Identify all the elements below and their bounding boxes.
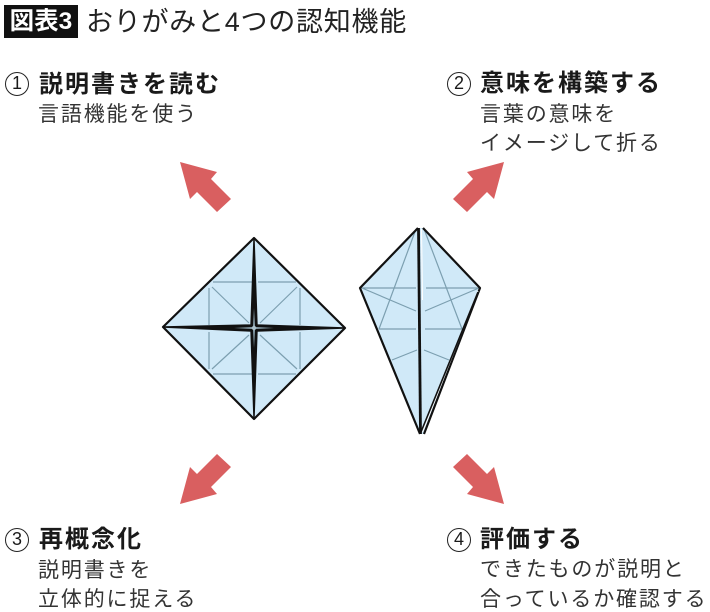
number 3: 3 [12,529,22,549]
description 4 [480,558,707,610]
description 3: 立体的に捉える [38,588,197,610]
heading 4: 評価する [480,526,584,553]
description 1: 言語機能を使う [38,103,198,126]
description 2 [480,103,662,155]
number 3 [5,528,29,552]
number 1: 1 [12,73,22,93]
panel: step 2 [447,70,662,155]
heading 3: 再概念化 [39,526,143,553]
panel: step 1 [5,71,221,126]
number 2: 2 [454,73,464,93]
number 4 [447,528,471,552]
arrow: down-right [453,454,504,504]
heading 2: 意味を構築する [480,70,662,97]
number 4: 4 [454,529,464,549]
description 4: できたものが説明と [480,558,686,581]
description 2: 言葉の意味を [480,103,617,126]
heading 1: 説明書きを読む [39,71,221,98]
origami: kite base [360,228,480,434]
description 3 [38,559,197,610]
description 4: 合っているか確認する [480,588,707,610]
panel: step 4 [447,526,707,610]
figure badge: 図表3 [10,8,72,35]
description 2: イメージして折る [480,132,662,155]
arrow: up-right [453,162,504,212]
origami: square base [163,238,345,419]
arrow: up-left [180,162,231,212]
description 3: 説明書きを [38,559,152,582]
arrow: down-left [180,454,231,504]
number 1 [5,72,29,96]
title [4,5,407,38]
panel: step 3 [5,526,197,610]
number 2 [447,72,471,96]
figure badge [4,5,78,38]
title text: おりがみと4つの認知機能 [86,7,407,37]
